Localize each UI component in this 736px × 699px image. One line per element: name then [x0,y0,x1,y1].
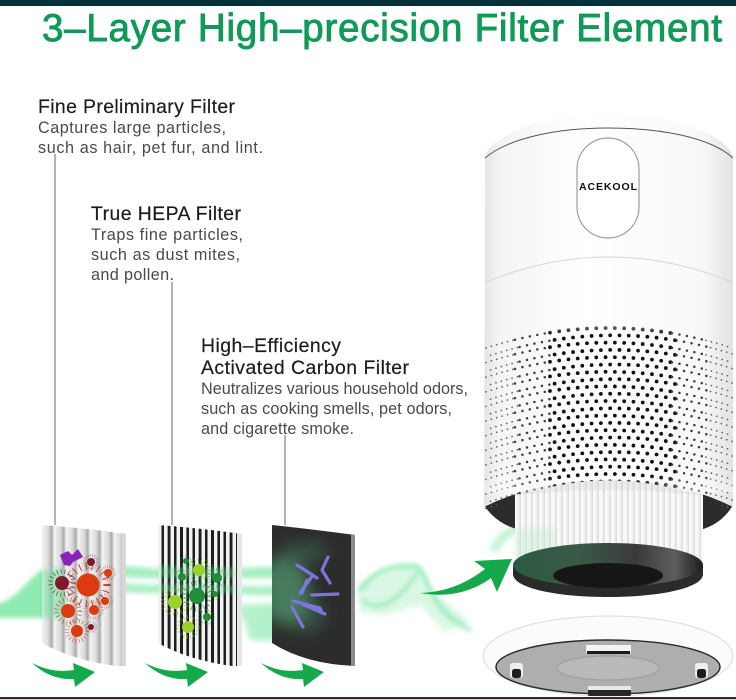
purifier: HEPA filter cylinder [515,478,703,570]
green wisps near the purifier [360,528,520,630]
purifier: black filter cap [513,543,703,597]
purifier: dark interior [484,490,733,530]
particles: purple lint and red germs [50,549,115,641]
smoke entering the panel [42,568,66,618]
text block: true HEPA filter: such as dust mites, [91,246,240,264]
arrow: flow through carbon filter [261,663,324,687]
arrow: flow through preliminary filter [32,663,95,687]
title: 3–Layer High–precision Filter Element [42,7,722,50]
text block: activated carbon filter: High–Efficiency [201,335,341,357]
arrow: airflow into purifier [420,559,512,595]
text block: true HEPA filter [91,203,243,284]
particles: purple bacilli [292,557,338,627]
purifier: body seam [486,257,732,282]
text block: true HEPA filter: and pollen. [91,266,174,284]
purifier: logo badge: ACEKOOL [579,181,638,193]
text block: true HEPA filter: True HEPA Filter [91,203,242,225]
particles: green germs [163,556,225,637]
purifier: logo badge [577,138,639,238]
text block: activated carbon filter: such as cooking smells, pet odors, [201,400,452,418]
purifier: base plate [483,616,733,696]
smoke over the stripes [158,566,235,593]
panel: HEPA filter [158,525,242,666]
panel: carbon filter [272,525,355,666]
air purifier [483,114,736,696]
text block: true HEPA filter: Traps fine particles, [91,226,243,244]
leader lines [55,154,285,525]
text block: fine preliminary filter: such as hair, pet fur, and lint. [38,139,263,157]
text block: fine preliminary filter: Fine Preliminary Filter [38,96,236,118]
text block: activated carbon filter: Neutralizes various household odors, [201,380,468,398]
text block: fine preliminary filter [38,96,263,157]
text block: activated carbon filter [201,335,468,438]
green glow on carbon [258,542,329,633]
purifier: perforated grille [484,322,736,516]
text block: activated carbon filter: Activated Carbon Filter [201,357,410,379]
bottom band [0,697,736,699]
purifier: lid seam [485,128,733,158]
text block: activated carbon filter: and cigarette smoke. [201,420,354,438]
green airflow smoke behind the filters [0,564,470,642]
arrow: flow through HEPA filter [145,663,208,687]
panel: preliminary filter [42,525,126,666]
text block: fine preliminary filter: Captures large particles, [38,119,226,137]
purifier: shell [484,114,733,507]
top band [0,0,736,6]
